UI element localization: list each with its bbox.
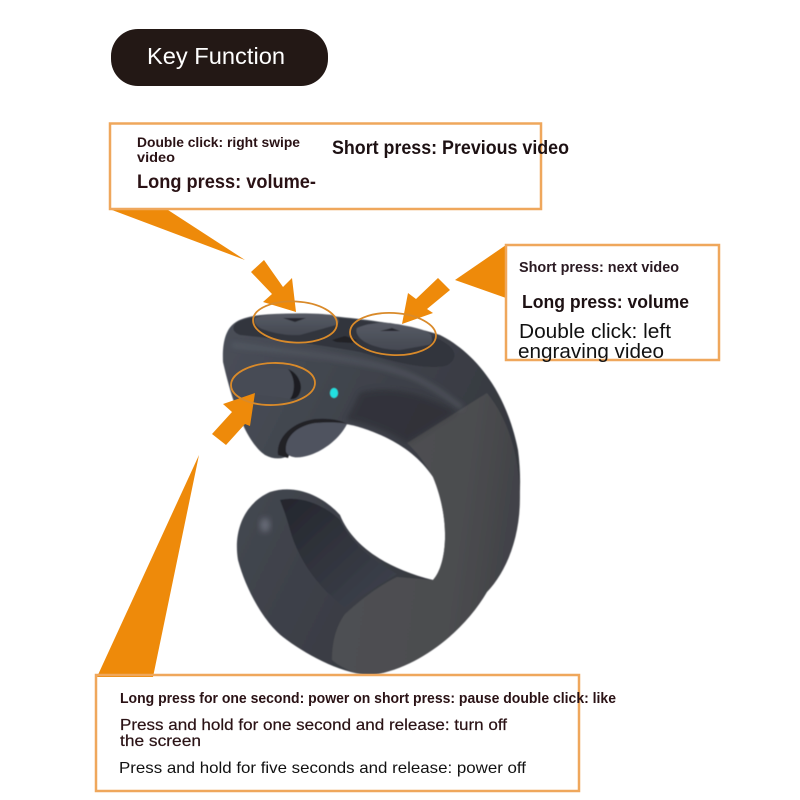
top right button (356, 323, 432, 350)
text: press and hold one second: Press and hold for one second and release: turn off (120, 717, 508, 734)
callout box: next video: engraving video (518, 341, 664, 363)
lower bump button (286, 422, 347, 457)
inner lobe hollow (280, 499, 397, 608)
product: smart ring remote (223, 313, 520, 675)
highlight ellipse: top right button (349, 311, 437, 357)
top left button (254, 313, 339, 335)
side button (234, 368, 301, 399)
button platform (233, 315, 454, 367)
lobe highlight (260, 518, 270, 532)
text: press and hold five seconds: Press and hold for five seconds and release: power off (119, 760, 527, 777)
highlight ellipse: side button (230, 362, 316, 406)
text: short press: Short press: Previous video (332, 138, 569, 159)
arrow: top right button (402, 278, 450, 324)
text: double click left: Double click: left (519, 321, 671, 343)
top left button glyph (283, 318, 306, 322)
center gap (332, 336, 357, 343)
callout box: power and screen: the screen (120, 733, 201, 750)
arrow: side button (212, 393, 255, 445)
ridge highlight below platform (232, 345, 462, 408)
callout box: previous video (110, 124, 569, 209)
callout box: power and screen (96, 675, 616, 791)
LED (330, 388, 338, 398)
title pill (111, 29, 328, 86)
highlight ellipse: top left button (252, 299, 338, 345)
side button shadow (288, 369, 301, 399)
ring body (223, 314, 520, 675)
text: long press volume: Long press: volume (522, 292, 689, 312)
text: long press: Long press: volume- (137, 172, 316, 193)
text: short press next: Short press: next video (519, 259, 679, 276)
callout wedge: top right (455, 245, 506, 298)
callout box: previous video: video (137, 149, 175, 165)
text: double click: Double click: right swipe (137, 134, 300, 150)
callout wedge: top left (112, 210, 245, 260)
top right button glyph (380, 328, 400, 331)
lighter wrist band (332, 393, 520, 675)
lower bump shadow (278, 419, 347, 458)
callout box: next video (506, 245, 719, 363)
title pill: Key Function (147, 43, 285, 69)
dark sheen on body (345, 390, 455, 443)
arrow: top left button (251, 260, 296, 312)
callout wedge: bottom (97, 455, 199, 677)
text: long press one second: Long press for one second: power on short press: pause double click: like (120, 690, 616, 707)
